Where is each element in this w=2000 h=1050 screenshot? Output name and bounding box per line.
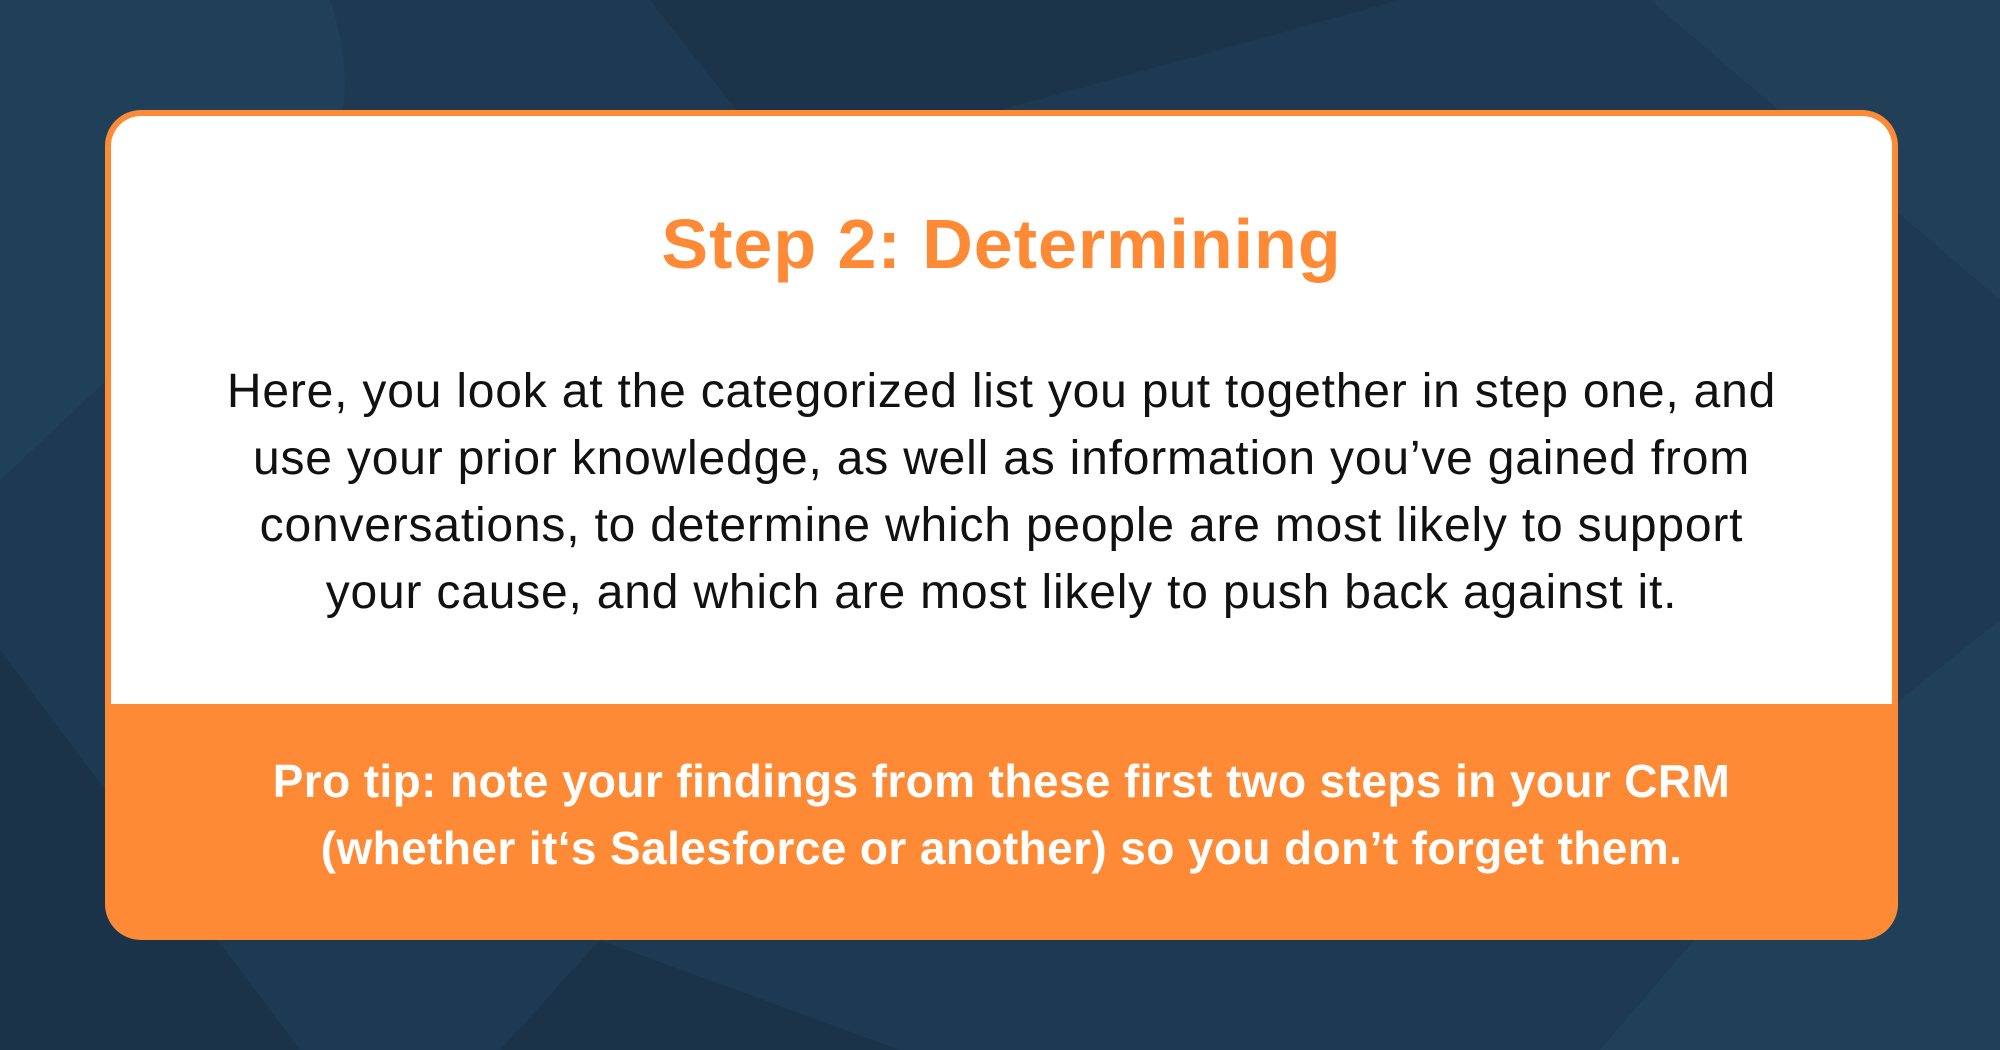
card [105, 110, 1898, 940]
pro tip: Pro tip: note your findings from these first two steps in your CRM [273, 755, 1730, 807]
pro tip: (whether it‘s Salesforce or another) so you don’t forget them. [321, 822, 1682, 874]
body text [227, 365, 1776, 619]
body text: your cause, and which are most likely to push back against it. [326, 566, 1677, 619]
pro tip [273, 755, 1730, 874]
body text: conversations, to determine which people are most likely to support [260, 499, 1743, 552]
body text: Here, you look at the categorized list you put together in step one, and [227, 365, 1776, 418]
body text: use your prior knowledge, as well as information you’ve gained from [253, 432, 1750, 485]
title: Step 2: Determining [661, 205, 1342, 283]
white panel [111, 116, 1892, 704]
